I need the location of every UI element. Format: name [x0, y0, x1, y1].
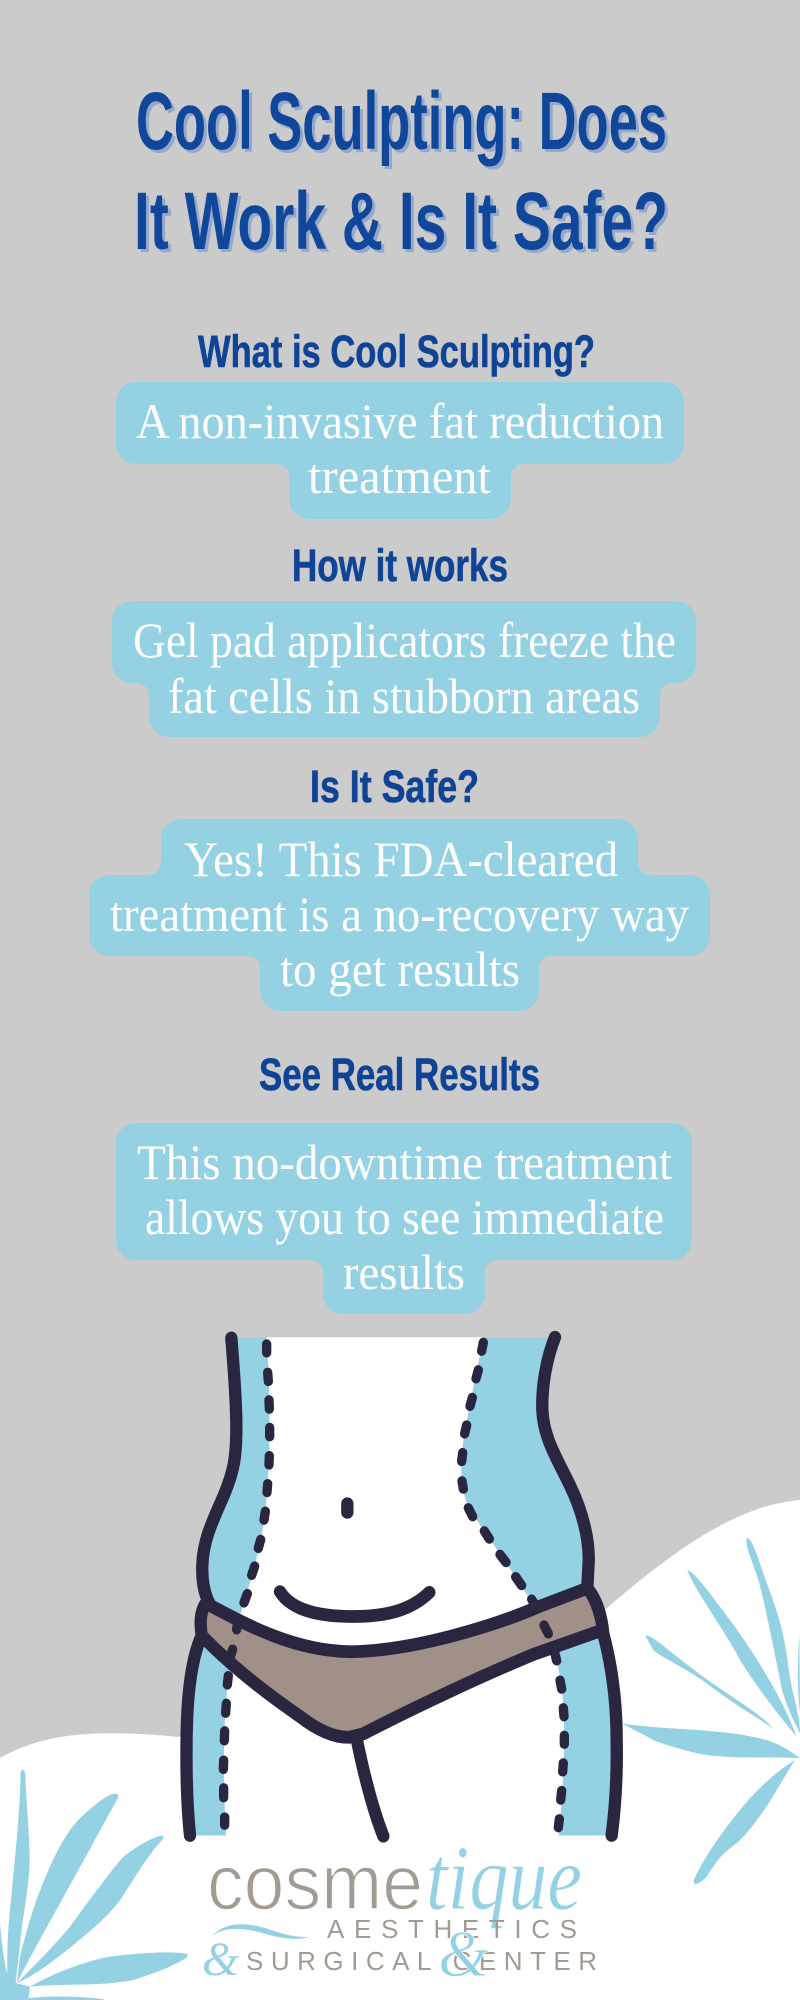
right thigh highlight — [555, 1632, 617, 1835]
title — [134, 76, 671, 270]
torso skin — [217, 1337, 583, 1837]
panel: is it safe: Yes! This FDA-cleared — [184, 831, 618, 887]
panel: see real results: This no-downtime treatment — [137, 1134, 672, 1190]
panel: what is cool sculpting — [116, 382, 684, 519]
heading: see real results: See Real Results — [259, 1049, 540, 1100]
logo: & — [202, 1933, 240, 1986]
panel: is it safe — [89, 819, 710, 1011]
panel: is it safe: treatment is a no-recovery way — [110, 886, 689, 942]
left waist highlight — [203, 1337, 270, 1625]
panel: see real results: results — [343, 1244, 465, 1300]
logo: tique — [426, 1827, 582, 1929]
panel: is it safe: to get results — [280, 941, 520, 997]
underwear — [202, 1587, 600, 1737]
logo: AESTHETICS — [327, 1914, 577, 1944]
heading: is it safe: Is It Safe? — [310, 761, 479, 812]
right waist highlight — [461, 1337, 589, 1608]
panel: see real results: allows you to see immediate — [145, 1189, 664, 1245]
panel: what is cool sculpting: treatment — [308, 448, 491, 504]
dashed treatment lines — [223, 1342, 564, 1828]
logo: cosme — [207, 1838, 423, 1926]
panel: what is cool sculpting: A non-invasive fat reduction — [136, 393, 664, 449]
panel: how it works: fat cells in stubborn areas — [168, 668, 640, 724]
icon: palm leaves right — [622, 1538, 800, 1884]
logo: & — [438, 1918, 490, 1991]
heading: what is cool sculpting: What is Cool Sculpting? — [198, 326, 595, 377]
heading: how it works: How it works — [292, 540, 508, 591]
body illustration — [186, 1337, 617, 1837]
logo: SURGICAL CENTER — [246, 1946, 597, 1976]
panel: how it works — [112, 601, 696, 737]
panel: how it works: Gel pad applicators freeze the — [133, 612, 676, 668]
logo — [202, 1827, 597, 1991]
left thigh highlight — [186, 1641, 230, 1835]
panel: see real results — [116, 1123, 692, 1314]
icon: palm leaves left — [0, 1770, 188, 2000]
body outlines — [186, 1337, 617, 1836]
